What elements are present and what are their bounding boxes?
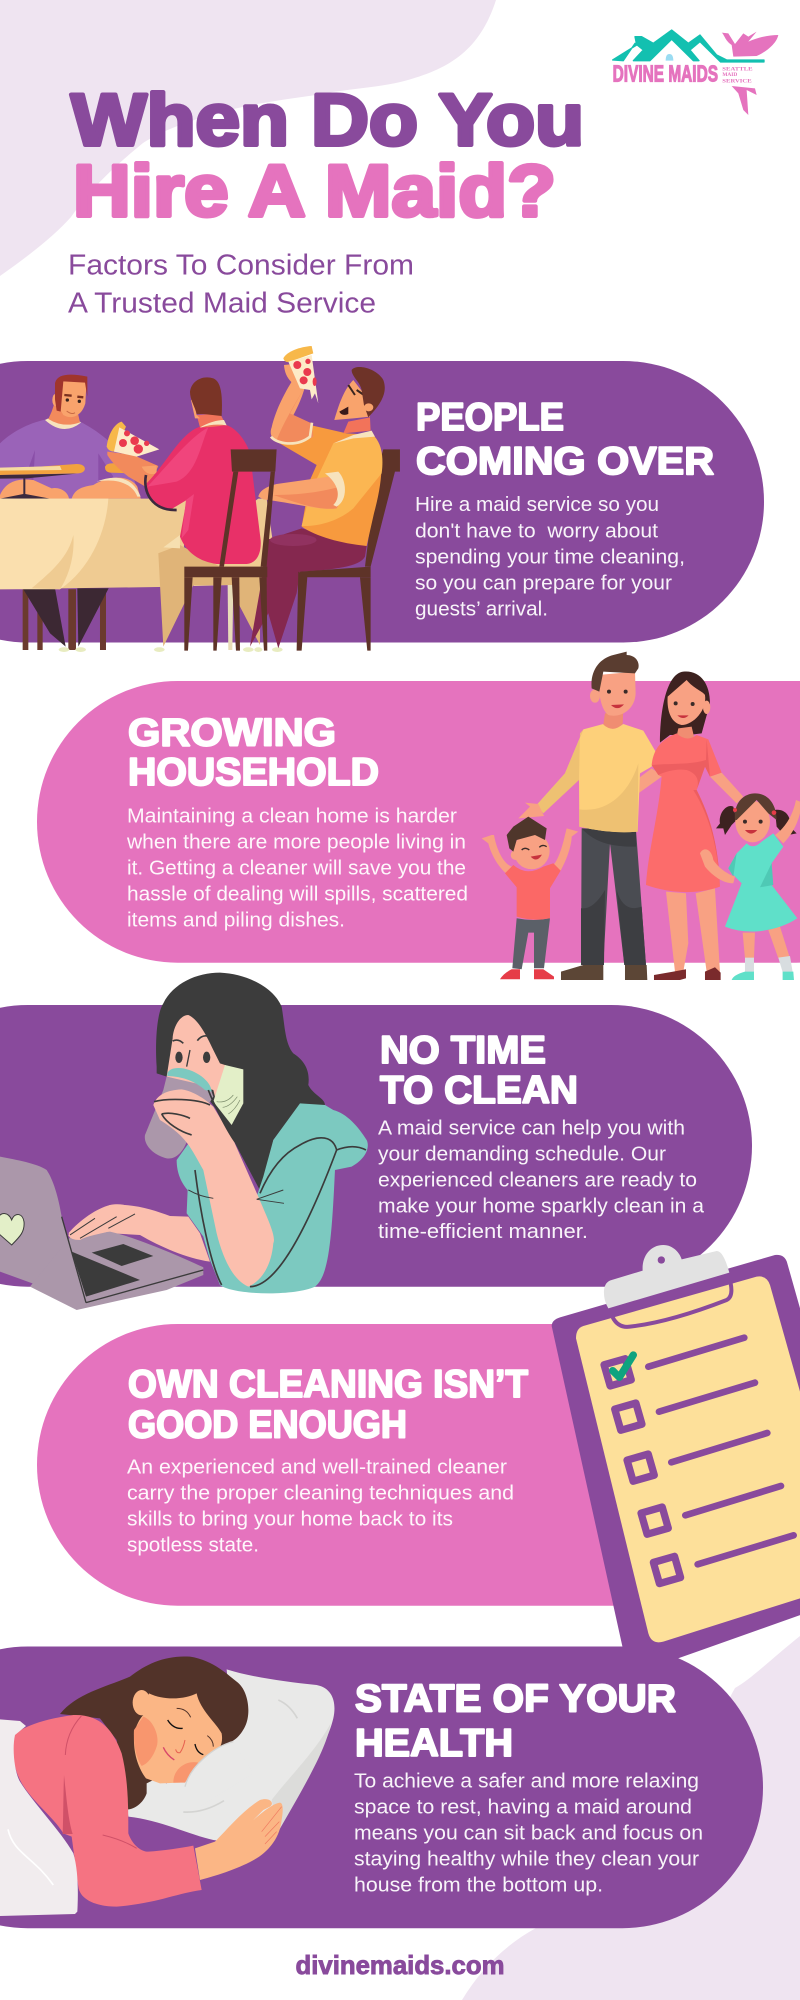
text block: state of your health <box>354 1770 703 1896</box>
text block: state of your health: space to rest, having a maid around <box>354 1796 692 1818</box>
text block: state of your health: To achieve a safer and more relaxing <box>354 1770 699 1792</box>
text block: people coming over: spending your time cleaning, <box>415 546 685 568</box>
text block: growing household: it. Getting a cleaner will save you the <box>127 857 466 880</box>
text block: state of your health: means you can sit back and focus on <box>354 1822 703 1844</box>
text block: growing household: when there are more people living in <box>126 831 466 854</box>
background blob: top left <box>0 0 496 276</box>
title: Hire A Maid? <box>73 151 556 232</box>
logo: Divine Maids: SERVICE <box>722 78 752 84</box>
text block: own cleaning: skills to bring your home back to its <box>127 1508 453 1530</box>
text block: no time to clean: time-efficient manner. <box>378 1220 588 1243</box>
subtitle: Factors To Consider From <box>68 249 414 281</box>
illustration: family of four <box>482 652 800 980</box>
text block: growing household: Maintaining a clean home is harder <box>127 805 457 828</box>
subtitle <box>68 249 414 319</box>
heading: state of your health: HEALTH <box>355 1722 513 1765</box>
text block: no time to clean: make your home sparkly clean in a <box>378 1194 705 1217</box>
heading: growing household <box>128 712 379 794</box>
heading: state of your health: STATE OF YOUR <box>355 1678 676 1721</box>
text block: people coming over: don't have to worry about <box>415 520 658 542</box>
heading: people coming over: COMING OVER <box>416 440 714 483</box>
text block: no time to clean: A maid service can help you with <box>378 1116 685 1139</box>
logo: Divine Maids <box>613 30 778 115</box>
background blob: bottom right <box>462 1636 800 2000</box>
heading: own cleaning: OWN CLEANING ISN’T <box>128 1363 528 1406</box>
text block: people coming over <box>415 493 685 620</box>
illustration: checklist clipboard <box>552 1245 800 1673</box>
heading: state of your health <box>355 1678 676 1765</box>
text block: state of your health: staying healthy while they clean your <box>354 1848 699 1870</box>
text block: growing household <box>126 805 468 932</box>
logo: Divine Maids: SEATTLE <box>722 66 753 72</box>
logo: Divine Maids: MAID <box>722 72 737 78</box>
text block: no time to clean: your demanding schedule. Our <box>378 1142 666 1165</box>
panel: people coming over <box>0 346 764 652</box>
text block: people coming over: so you can prepare for your <box>415 572 672 594</box>
text block: people coming over: Hire a maid service so you <box>415 493 659 516</box>
illustration: woman sleeping <box>0 1656 334 1916</box>
title: When Do You <box>71 80 584 161</box>
text block: growing household: hassle of dealing will spills, scattered <box>127 883 468 906</box>
panel: no time to clean <box>0 973 752 1310</box>
panel: own cleaning isn't good enough <box>37 1245 800 1673</box>
heading: people coming over <box>416 396 714 483</box>
text block: own cleaning <box>127 1456 514 1557</box>
text block: own cleaning: carry the proper cleaning techniques and <box>127 1482 514 1504</box>
heading: own cleaning: GOOD ENOUGH <box>128 1404 407 1446</box>
text block: state of your health: house from the bottom up. <box>354 1874 603 1896</box>
heading: growing household: HOUSEHOLD <box>128 751 379 794</box>
heading: no time to clean <box>380 1029 578 1112</box>
text block: no time to clean <box>378 1116 705 1243</box>
illustration: friends eating pizza at a table <box>0 346 400 652</box>
logo: Divine Maids: DIVINE MAIDS <box>613 60 718 86</box>
heading: no time to clean: NO TIME <box>380 1029 546 1072</box>
text block: no time to clean: experienced cleaners are ready to <box>378 1168 697 1191</box>
heading: own cleaning <box>128 1363 528 1446</box>
heading: growing household: GROWING <box>128 712 336 754</box>
panel: state of your health <box>0 1646 763 1928</box>
subtitle: A Trusted Maid Service <box>68 287 376 319</box>
text block: people coming over: guests’ arrival. <box>415 598 548 620</box>
text block: own cleaning: spotless state. <box>127 1534 259 1557</box>
heading: no time to clean: TO CLEAN <box>380 1069 578 1112</box>
panel: growing household <box>37 652 800 980</box>
text block: own cleaning: An experienced and well-trained cleaner <box>127 1456 507 1478</box>
illustration: woman drinking at a laptop <box>0 973 368 1310</box>
heading: people coming over: PEOPLE <box>416 396 564 439</box>
footer: website: divinemaids.com <box>296 1950 504 1980</box>
text block: growing household: items and piling dishes. <box>127 909 345 932</box>
title <box>71 80 584 232</box>
